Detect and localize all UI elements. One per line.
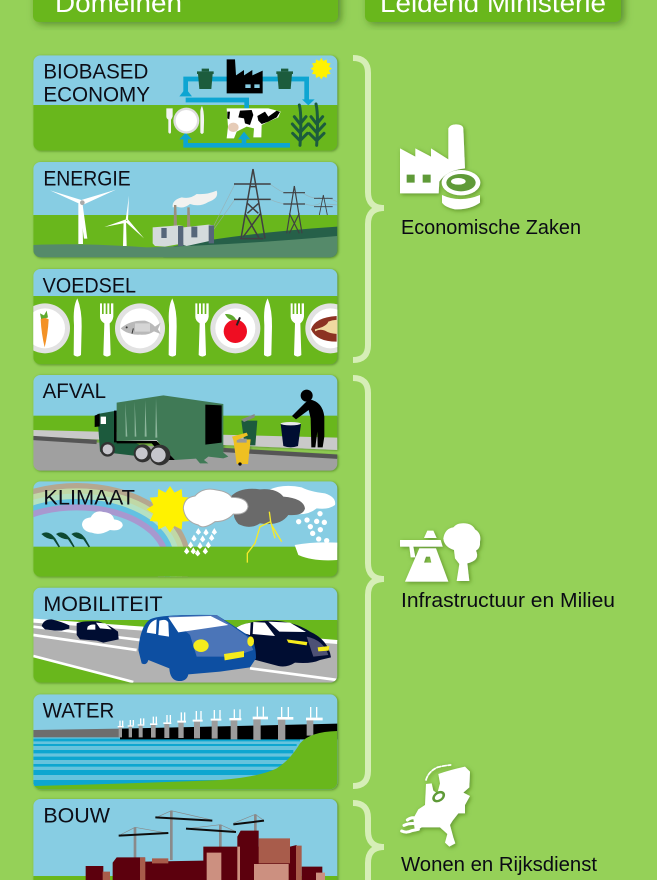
panel: Afval xyxy=(33,375,337,471)
icon: cow xyxy=(227,108,281,138)
panel group: upper domain panels xyxy=(33,55,337,257)
icon: storm cloud xyxy=(230,489,305,527)
icon: plate and cutlery xyxy=(166,106,204,134)
label: Economische Zaken: Economische Zaken xyxy=(401,217,581,239)
icon: meat xyxy=(311,316,338,342)
icon: far white cloud xyxy=(268,486,335,514)
panel: Klimaat xyxy=(32,480,340,579)
icon: motorway and tree xyxy=(400,523,480,582)
heading: Mobiliteit: MOBILITEIT xyxy=(43,592,163,616)
road xyxy=(33,621,337,683)
icon: power plant xyxy=(153,191,217,247)
icon: sun xyxy=(147,486,193,533)
hills xyxy=(33,227,337,257)
icon: white cloud xyxy=(183,489,248,527)
panel: Biobased Economy xyxy=(33,55,337,151)
heading: Voedsel: VOEDSEL xyxy=(43,273,136,297)
icon: small cloud xyxy=(82,511,123,534)
icon: garbage truck xyxy=(95,395,228,465)
icon: snow xyxy=(296,511,329,543)
panel group: lower domain panels xyxy=(33,588,337,880)
icon: map of the Netherlands xyxy=(402,765,470,847)
icon: carrot xyxy=(40,311,49,347)
plates xyxy=(20,303,355,353)
panel: Bouw xyxy=(33,799,337,880)
panel: Water xyxy=(33,694,337,789)
icon: distant car xyxy=(42,619,69,631)
road and pavement xyxy=(33,430,337,471)
label: Wonen en Rijksdienst: Wonen en Rijksdienst xyxy=(401,854,597,876)
icon: factory with coins xyxy=(400,124,480,209)
heading: Biobased Economy: ECONOMY xyxy=(43,82,150,106)
icon: dark car xyxy=(232,621,331,667)
brace: Economische Zaken xyxy=(353,58,384,360)
panel: Energie xyxy=(33,162,337,257)
icon: wind-blown trees xyxy=(41,532,90,547)
heading: Water: WATER xyxy=(43,698,114,722)
icon: factory xyxy=(227,59,263,93)
cutlery xyxy=(74,298,304,357)
icon: lightning xyxy=(247,512,282,563)
icon: buildings xyxy=(86,831,325,880)
panel: Voedsel xyxy=(20,269,355,364)
icon: sun xyxy=(311,58,332,79)
icon: cranes xyxy=(119,811,264,863)
icon: wind turbines xyxy=(50,190,144,246)
panel: Mobiliteit xyxy=(33,588,337,683)
icon: snow bank xyxy=(295,542,337,560)
icon: rain xyxy=(184,528,217,556)
panel group: middle domain panels xyxy=(0,269,355,634)
power lines xyxy=(213,184,337,230)
heading: Biobased Economy: BIOBASED xyxy=(43,60,148,84)
cycle arrows xyxy=(179,79,315,145)
icon: waste bins xyxy=(197,69,293,89)
storm surge barrier xyxy=(33,707,337,740)
heading: Energie: ENERGIE xyxy=(43,167,131,191)
icon: apple xyxy=(224,314,247,343)
heading: Biobased Economy xyxy=(45,64,150,102)
icon: yellow bin xyxy=(232,433,251,466)
heading: Klimaat: KLIMAAT xyxy=(43,485,135,509)
brace: Wonen en Rijksdienst xyxy=(353,803,384,880)
label: Infrastructuur en Milieu: Infrastructuur en Milieu xyxy=(401,590,615,612)
rainbow xyxy=(33,483,188,577)
heading: Domeinen xyxy=(33,0,338,22)
icon: green bin xyxy=(241,414,257,445)
icon: second car xyxy=(77,621,119,643)
icon: person at bucket xyxy=(281,390,324,447)
icon: crops xyxy=(292,104,325,145)
icon: pylons xyxy=(234,169,333,239)
brace: Infrastructuur en Milieu xyxy=(353,378,384,786)
green bank xyxy=(33,731,337,789)
icon: blue car xyxy=(138,615,256,681)
heading: Bouw: BOUW xyxy=(43,804,111,828)
water surface xyxy=(33,737,337,789)
heading: Afval: AFVAL xyxy=(43,379,106,403)
icon: fish xyxy=(121,321,161,335)
